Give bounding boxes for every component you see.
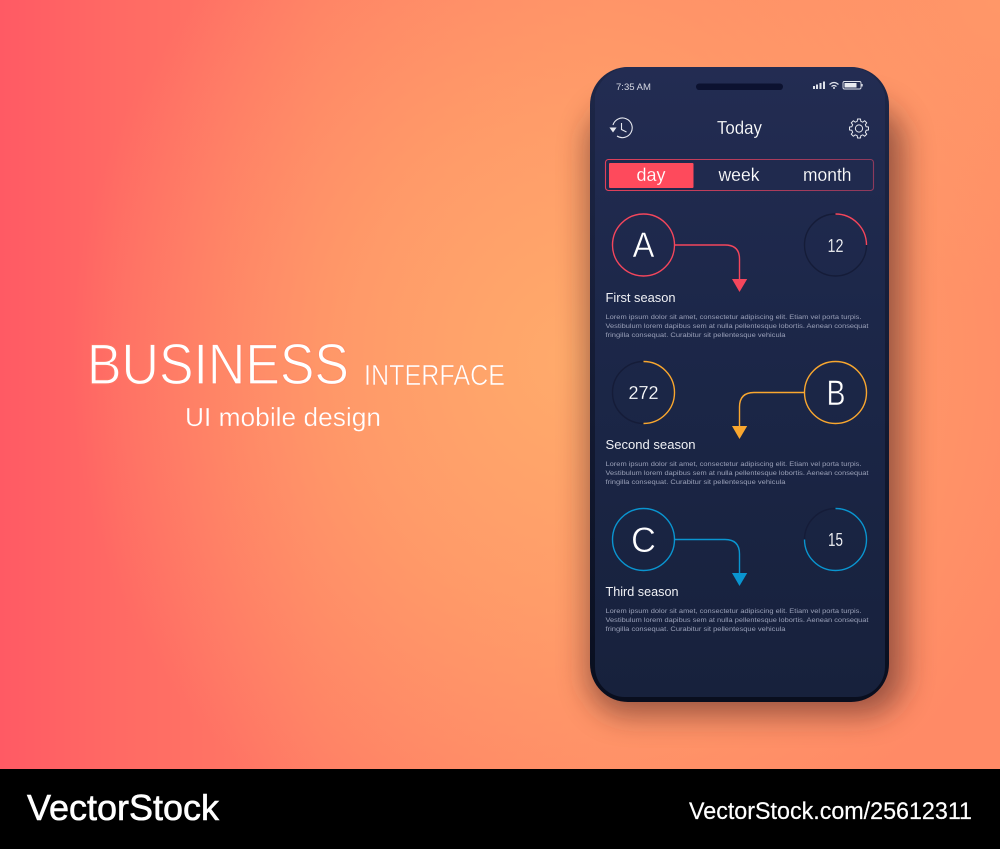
arrow B <box>732 392 804 439</box>
progress ring 12: 12 <box>828 236 844 256</box>
segmented tabs <box>606 160 874 190</box>
badge B: B <box>826 374 846 413</box>
tab: day active <box>609 163 694 188</box>
badge A <box>612 214 674 276</box>
screen title: Today <box>717 118 762 138</box>
paragraph: Vestibulum lorem dapibus sem at nulla pellentesque lobortis. Aenean consequat <box>606 323 869 330</box>
progress ring 272 <box>612 362 674 424</box>
heading: business interface: BUSINESS <box>87 333 349 397</box>
paragraph <box>606 461 869 486</box>
heading: business interface: INTERFACE <box>364 360 505 392</box>
badge C <box>612 508 674 570</box>
heading: business interface <box>87 333 505 397</box>
paragraph: Lorem ipsum dolor sit amet, consectetur adipiscing elit. Etiam vel porta turpis. <box>606 608 862 615</box>
segmented tabs: day <box>636 165 666 185</box>
progress ring 272: 272 <box>628 383 658 403</box>
progress ring 15 <box>804 508 866 570</box>
paragraph <box>606 314 869 339</box>
paragraph: Vestibulum lorem dapibus sem at nulla pellentesque lobortis. Aenean consequat <box>606 470 869 477</box>
subheading: UI mobile design <box>185 402 381 432</box>
heading: first season: First season <box>606 290 676 305</box>
badge B <box>804 362 866 424</box>
tab: week: week <box>718 165 760 185</box>
heading: second season: Second season <box>606 437 696 452</box>
phone screen <box>595 67 885 697</box>
paragraph <box>606 608 869 633</box>
paragraph: Vestibulum lorem dapibus sem at nulla pellentesque lobortis. Aenean consequat <box>606 617 869 624</box>
arrow A <box>675 245 747 292</box>
paragraph: fringilla consequat. Curabitur sit pellentesque vehicula <box>606 626 786 633</box>
arrow C <box>675 540 747 586</box>
section: first season <box>606 214 869 339</box>
section: second season <box>606 362 869 486</box>
status bar: 7:35 AM <box>616 82 651 92</box>
watermark url: VectorStock.com/25612311 <box>689 798 972 825</box>
paragraph: Lorem ipsum dolor sit amet, consectetur adipiscing elit. Etiam vel porta turpis. <box>606 314 862 321</box>
tab: month: month <box>803 165 852 185</box>
progress ring 15: 15 <box>828 530 843 550</box>
badge A: A <box>632 226 655 265</box>
watermark logo: VectorStock <box>27 787 220 828</box>
paragraph: fringilla consequat. Curabitur sit pellentesque vehicula <box>606 332 786 339</box>
progress ring 12 <box>804 214 866 276</box>
paragraph: fringilla consequat. Curabitur sit pellentesque vehicula <box>606 479 786 486</box>
phone body <box>590 67 889 702</box>
heading: third season: Third season <box>606 584 678 599</box>
badge C: C <box>631 521 656 560</box>
paragraph: Lorem ipsum dolor sit amet, consectetur adipiscing elit. Etiam vel porta turpis. <box>606 461 862 468</box>
watermark bar <box>0 769 1000 849</box>
phone shadow <box>588 105 904 715</box>
phone mockup <box>590 67 889 702</box>
icon: settings gear <box>850 119 868 138</box>
section: third season <box>606 508 869 633</box>
status bar <box>616 82 863 92</box>
icon: history clock <box>610 118 632 138</box>
